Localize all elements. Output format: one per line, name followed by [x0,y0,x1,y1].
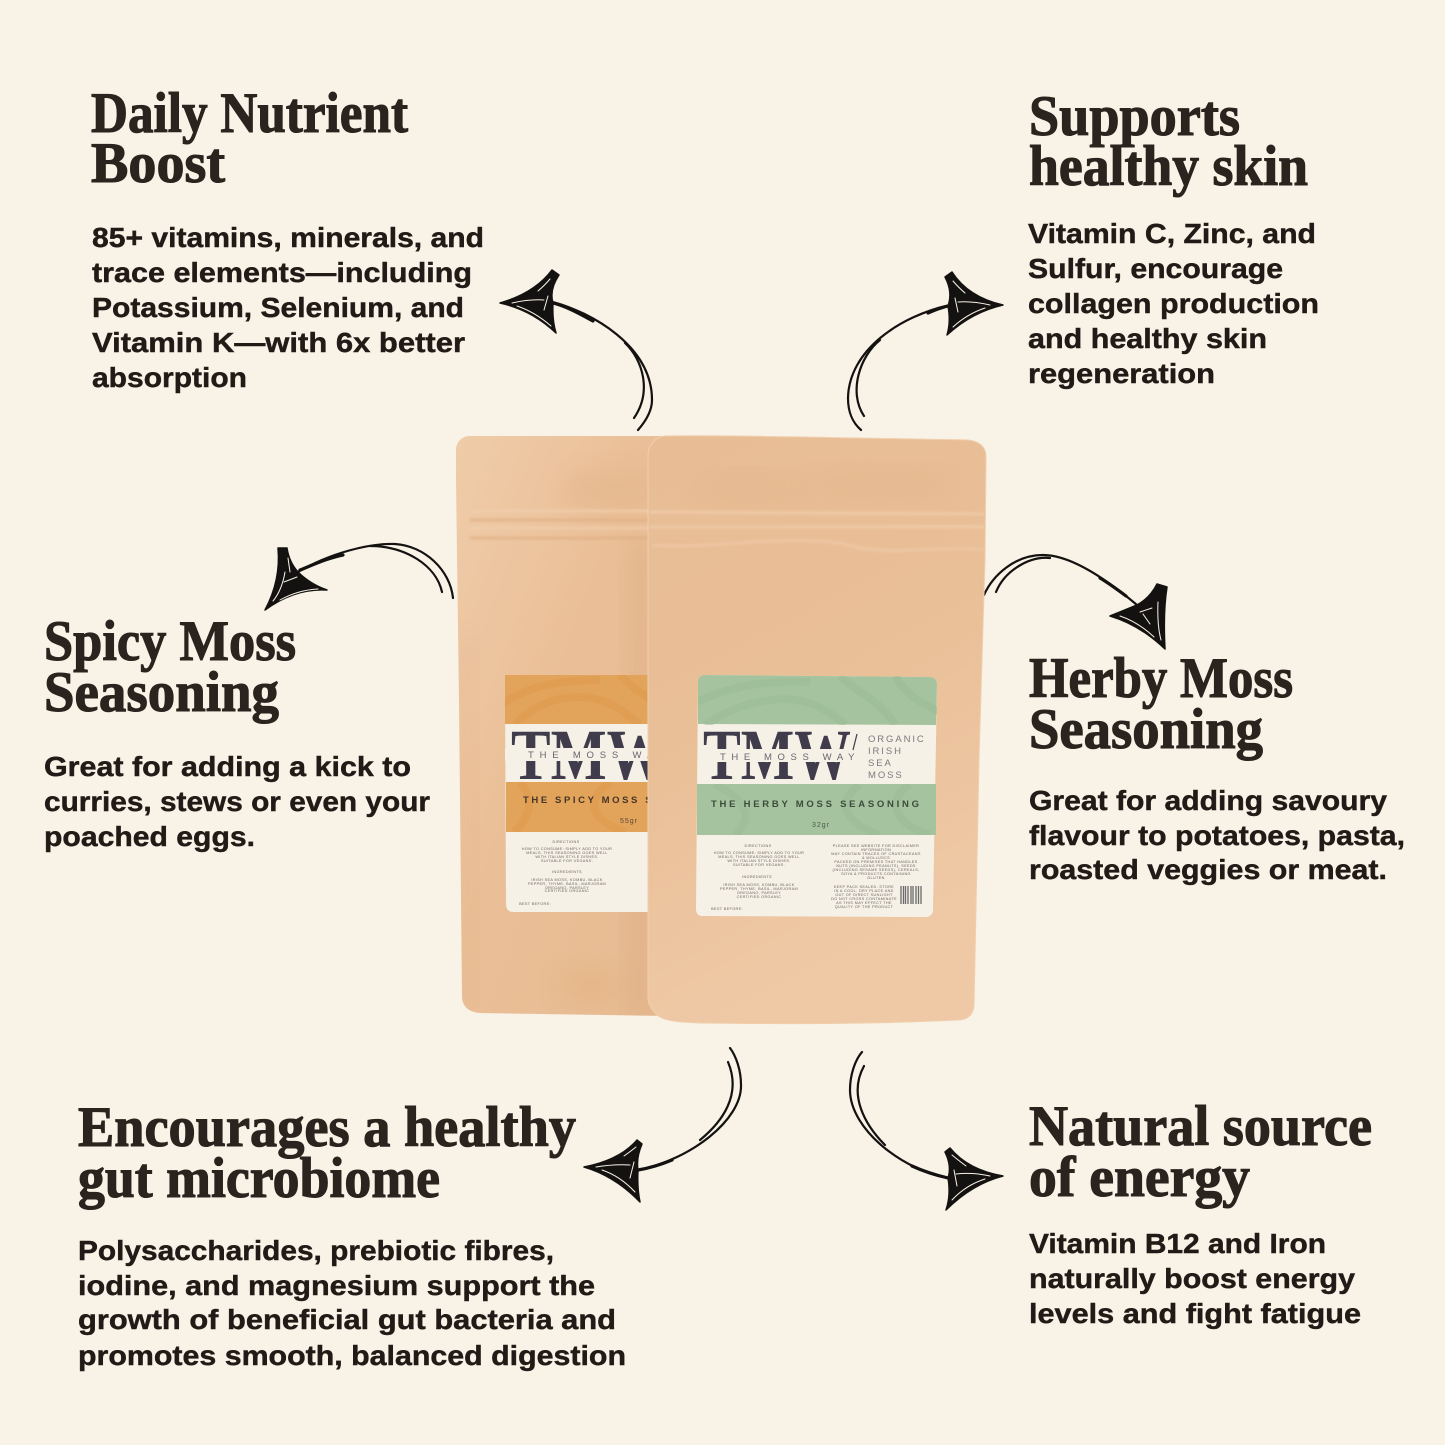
pouch label: SEA [868,758,893,769]
heading: Encourages a healthy gut microbiome: gut microbiome [78,1147,440,1210]
text: gut microbiome description: iodine, and magnesium support the [78,1270,595,1301]
heading: Natural source of energy: of energy [1029,1146,1250,1209]
heading: Spicy Moss Seasoning [44,610,296,724]
text: Spicy Moss Seasoning description [44,751,430,852]
text: Herby Moss Seasoning description: roasted veggies or meat. [1029,854,1387,885]
text: Spicy Moss Seasoning description: Great for adding a kick to [44,751,411,782]
pouch label: 32gr [812,822,830,829]
text: Supports healthy skin description: and healthy skin [1028,323,1267,354]
pouch label: MOSS [868,770,904,781]
arrow: to Herby Moss Seasoning [984,555,1167,649]
arrow: to Supports healthy skin [848,272,1003,430]
heading: Herby Moss Seasoning: Seasoning [1029,698,1263,761]
pouch label: THE HERBY MOSS SEASONING [711,799,919,810]
text: gut microbiome description: promotes smooth, balanced digestion [78,1340,626,1371]
pouch label: CERTIFIED ORGANIC [737,895,781,899]
heading: Supports healthy skin: Supports [1029,85,1240,148]
arrow: to Spicy Moss Seasoning [265,544,453,610]
heading: Daily Nutrient Boost [91,82,408,195]
pouch label: IRISH SEA MOSS, KOMBU, BLACK [531,878,603,882]
arrow: to Natural source of energy [850,1052,1003,1210]
pouch label: TMW [703,715,851,795]
pouch label: OREGANO, PARSLEY [545,886,589,890]
pouch label: IRISH [868,746,903,757]
pouch label: IN A COOL, DRY PLACE AND [834,889,894,893]
pouch label: & MOLLUSCS [862,856,890,860]
text: Natural source of energy description: levels and fight fatigue [1029,1298,1361,1329]
text: Supports healthy skin description [1028,218,1319,389]
pouch label: SUITABLE FOR VEGANS. [733,863,785,867]
product: spicy moss seasoning pouch [456,436,662,1016]
text: Herby Moss Seasoning description: Great for adding savoury [1029,785,1387,816]
pouch label: INGREDIENTS [742,875,772,879]
pouch label: QUALITY OF THE PRODUCT [835,905,894,909]
text: Herby Moss Seasoning description [1029,785,1405,885]
text: Natural source of energy description [1029,1228,1361,1329]
heading: Herby Moss Seasoning: Herby Moss [1029,647,1293,710]
pouch label: HOW TO CONSUME: SIMPLY ADD TO YOUR [522,847,612,851]
text: Supports healthy skin description: Vitamin C, Zinc, and [1028,218,1316,249]
pouch label: NUTS (INCLUDING PEANUTS), SEEDS [836,864,916,868]
heading: Daily Nutrient Boost: Boost [91,132,225,195]
text: gut microbiome description [78,1235,626,1371]
pouch body [456,436,670,1016]
pouch label: THE MOSS WAY [720,752,860,763]
pouch label: GLUTEN [867,876,885,880]
arrow: to gut microbiome [584,1048,741,1202]
arrow: to Daily Nutrient Boost [500,270,652,430]
text: gut microbiome description: growth of beneficial gut bacteria and [78,1304,616,1335]
pouch label: KEEP PACK SEALED. STORE [834,885,894,889]
text: Daily Nutrient Boost description: Vitamin K—with 6x better [92,327,465,358]
pouch label: DIRECTIONS [745,844,772,848]
pouch label: 55gr [620,818,638,825]
pouch label: HOW TO CONSUME: SIMPLY ADD TO YOUR [714,851,804,855]
text: Supports healthy skin description: Sulfur, encourage [1028,253,1283,284]
pouch label: THE MOSS WAY [528,750,670,761]
pouch label: THE SPICY MOSS SEASONING [523,795,726,806]
barcode [901,886,921,904]
text: Daily Nutrient Boost description: trace elements—including [92,257,472,288]
heading: Supports healthy skin [1029,85,1308,198]
text: Daily Nutrient Boost description: 85+ vitamins, minerals, and [92,222,484,253]
text: Daily Nutrient Boost description: Potassium, Selenium, and [92,292,464,323]
pouch label: PEPPER, THYME, BASIL, MARJORAM [720,887,798,891]
pouch label: ORGANIC [868,734,926,745]
pouch label [690,675,940,917]
pouch label: SUITABLE FOR VEGANS. [541,859,593,863]
heading: Daily Nutrient Boost: Daily Nutrient [91,82,408,145]
heading: Natural source of energy [1029,1095,1372,1209]
pouch label: INFORMATION [861,848,891,852]
text: Supports healthy skin description: regeneration [1028,358,1215,389]
pouch label: AS THIS MAY EFFECT THE [836,901,892,905]
pouch label: (INCLUDING SESAME SEEDS), CEREALS, [832,868,920,872]
text: Natural source of energy description: Vitamin B12 and Iron [1029,1228,1326,1259]
text: Natural source of energy description: naturally boost energy [1029,1263,1355,1294]
pouch label: OREGANO, PARSLEY [737,891,781,895]
heading: Natural source of energy: Natural source [1029,1095,1372,1158]
pouch label: CERTIFIED ORGANIC [545,889,589,893]
pouch label: BEST BEFORE: [519,902,551,906]
pouch label [505,675,648,912]
product: herby moss seasoning pouch [648,436,986,1024]
text: Daily Nutrient Boost description: absorption [92,362,247,393]
pouch label: PLEASE SEE WEBSITE FOR DISCLAIMER [833,844,919,848]
text: Daily Nutrient Boost description [92,222,484,393]
pouch label: IRISH SEA MOSS, KOMBU, BLACK [723,883,795,887]
text: Supports healthy skin description: collagen production [1028,288,1319,319]
heading: Supports healthy skin: healthy skin [1029,135,1308,198]
pouch label: DO NOT CROSS CONTAMINATE [831,897,897,901]
text: Spicy Moss Seasoning description: poached eggs. [44,821,255,852]
pouch label: DIRECTIONS [553,840,580,844]
pouch label: WITH ITALIAN STYLE DISHES. [535,855,599,859]
pouch label: BEST BEFORE: [711,907,743,911]
pouch label: MEALS. THIS SEASONING GOES WELL [526,851,608,855]
heading: Encourages a healthy gut microbiome: Encourages a healthy [78,1096,576,1159]
pouch label: PEPPER, THYME, BASIL, MARJORAM [528,882,606,886]
pouch label: TMW [511,715,666,795]
pouch body [648,436,986,1024]
heading: Encourages a healthy gut microbiome [78,1096,576,1210]
pouch label: PACKED ON PREMISES THAT HANDLES [834,860,918,864]
text: gut microbiome description: Polysaccharides, prebiotic fibres, [78,1235,554,1266]
pouch label: MAY CONTAIN TRACES OF CRUSTACEANS [831,852,921,856]
text: Herby Moss Seasoning description: flavour to potatoes, pasta, [1029,820,1405,851]
text: Spicy Moss Seasoning description: curries, stews or even your [44,786,430,817]
heading: Spicy Moss Seasoning: Spicy Moss [44,610,296,673]
pouch label: SOYA & PRODUCTS CONTAINING [841,872,911,876]
pouch label: WITH ITALIAN STYLE DISHES. [727,859,791,863]
pouch label: OUT OF DIRECT SUNLIGHT [835,893,893,897]
heading: Spicy Moss Seasoning: Seasoning [44,661,279,724]
pouch label: MEALS. THIS SEASONING GOES WELL [718,855,800,859]
pouch label: INGREDIENTS [552,870,582,874]
heading: Herby Moss Seasoning [1029,647,1293,761]
